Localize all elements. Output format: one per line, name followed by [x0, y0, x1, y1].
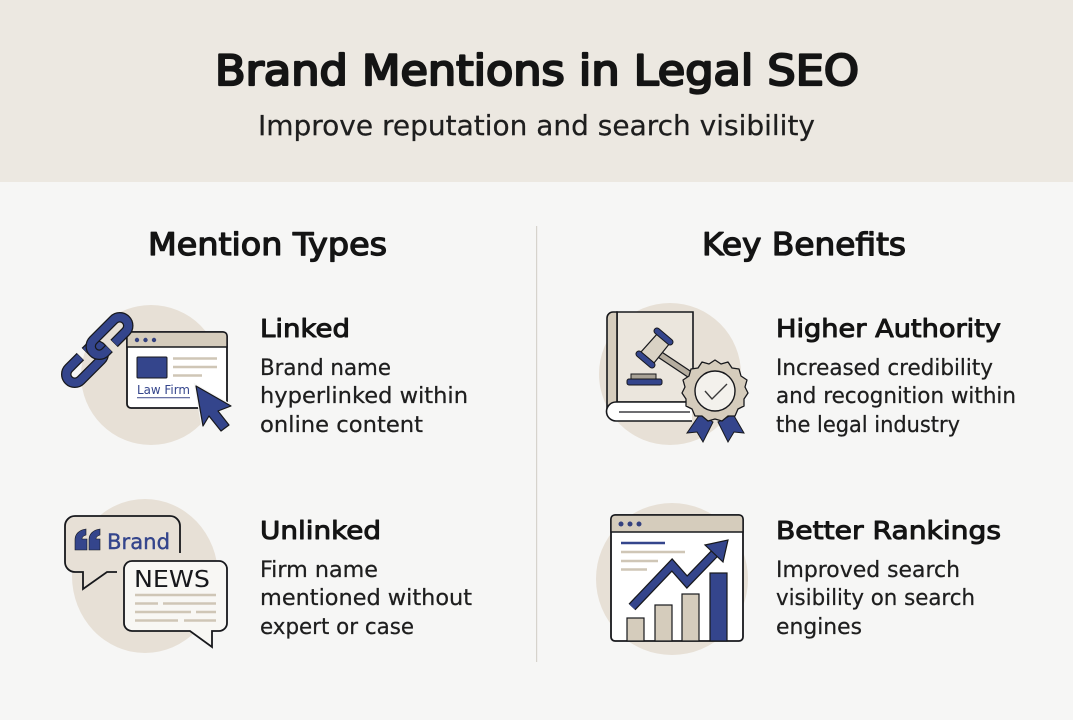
- icon: quote and news bubbles: [65, 499, 227, 653]
- item: unlinked: [65, 499, 472, 653]
- description: better rankings: Improved search: [776, 558, 960, 583]
- panel: key benefits: [596, 227, 1016, 655]
- header band: [0, 0, 1073, 182]
- description: higher authority: and recognition within: [776, 384, 1016, 409]
- subtitle: Improve reputation and search visibility: [258, 110, 815, 142]
- description: unlinked: mentioned without: [260, 586, 472, 611]
- item: linked: [63, 305, 468, 445]
- title: Brand Mentions in Legal SEO: [215, 46, 859, 95]
- label: unlinked: Unlinked: [260, 516, 381, 545]
- description: linked: hyperlinked within: [260, 384, 468, 409]
- icon: chain link and browser: Law Firm: [137, 383, 190, 397]
- heading: mention types: Mention Types: [148, 227, 387, 263]
- description: better rankings: visibility on search: [776, 586, 975, 611]
- label: linked: Linked: [260, 314, 350, 343]
- description: higher authority: the legal industry: [776, 413, 960, 438]
- description: unlinked: expert or case: [260, 615, 414, 640]
- description: linked: online content: [260, 413, 423, 438]
- icon: quote and news bubbles: Brand: [107, 530, 170, 554]
- description: unlinked: Firm name: [260, 558, 378, 583]
- panel: mention types: [63, 227, 472, 653]
- icon: quote and news bubbles: NEWS: [134, 567, 210, 593]
- heading: key benefits: Key Benefits: [702, 227, 906, 263]
- description: linked: [260, 356, 468, 438]
- description: higher authority: Increased credibility: [776, 356, 993, 381]
- icon: chain link and browser: [63, 305, 231, 445]
- label: better rankings: Better Rankings: [776, 516, 1001, 545]
- description: better rankings: [776, 558, 975, 640]
- icon: law book, gavel and seal: [599, 303, 748, 445]
- icon: ranking chart window: [596, 503, 748, 655]
- label: higher authority: Higher Authority: [776, 314, 1001, 343]
- item: better rankings: [596, 503, 1001, 655]
- description: linked: Brand name: [260, 356, 391, 381]
- description: unlinked: [260, 558, 472, 640]
- center divider: [536, 226, 537, 662]
- item: higher authority: [599, 303, 1016, 445]
- description: better rankings: engines: [776, 615, 862, 640]
- description: higher authority: [776, 356, 1016, 438]
